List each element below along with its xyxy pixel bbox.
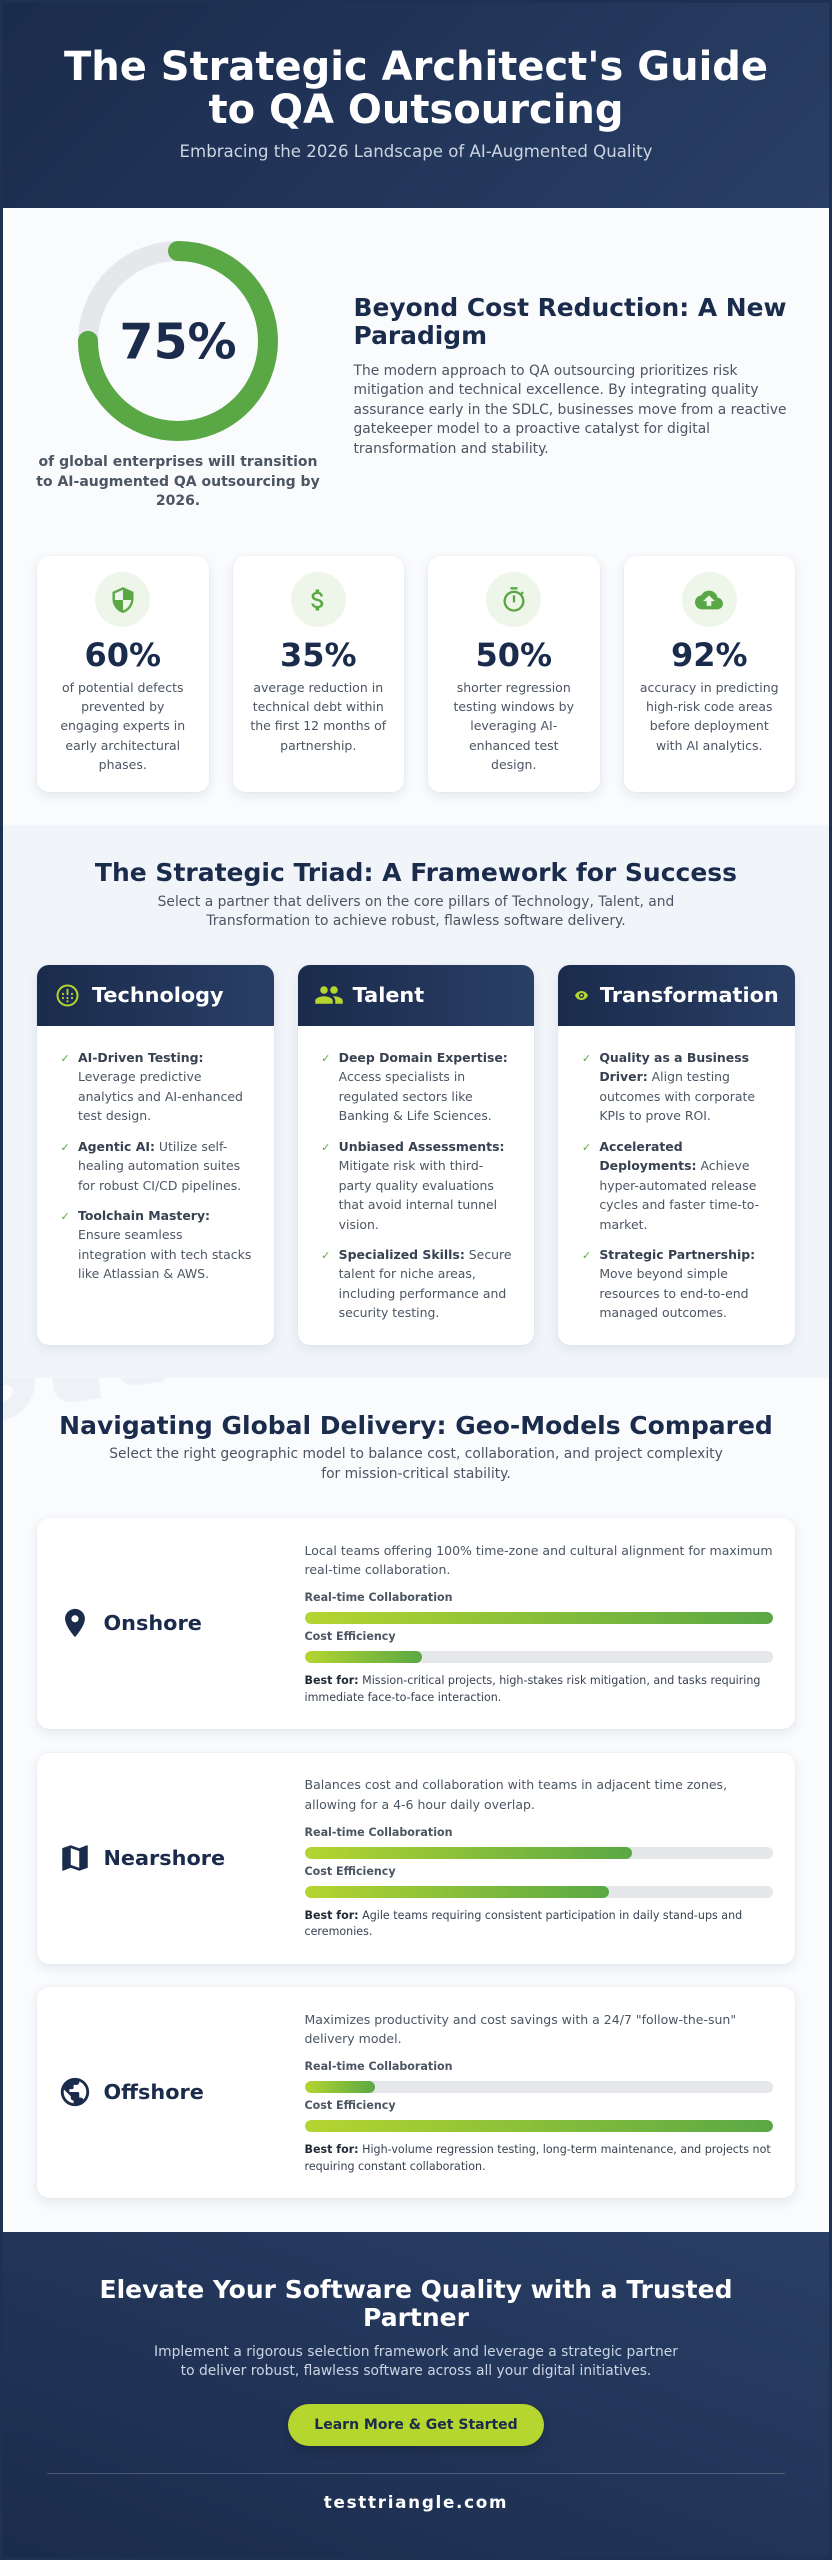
header banner bbox=[0, 0, 832, 208]
stat description: enhanced test bbox=[469, 738, 559, 753]
bullet text: security testing. bbox=[339, 1305, 439, 1320]
icon: shield bbox=[95, 572, 150, 627]
bar: cost 65% bbox=[304, 1886, 773, 1898]
title: The Strategic Architect's Guide bbox=[64, 44, 768, 90]
bullet text: Banking & Life Sciences. bbox=[339, 1108, 492, 1123]
bullet text: for robust CI/CD pipelines. bbox=[78, 1178, 241, 1193]
bullet text: Move beyond simple bbox=[599, 1266, 728, 1281]
intro paragraph: The modern approach to QA outsourcing prioritizes risk bbox=[354, 362, 738, 378]
model description: Local teams offering 100% time-zone and cultural alignment for maximum bbox=[304, 1542, 773, 1558]
bar label: Cost Efficiency bbox=[304, 1864, 396, 1878]
decorative watermark shapes bbox=[3, 1378, 164, 1420]
bullet text: Unbiased Assessments: bbox=[339, 1139, 504, 1154]
bullet text: KPIs to prove ROI. bbox=[599, 1108, 711, 1123]
website: testtriangle.com bbox=[324, 2492, 508, 2512]
stat value: 35% bbox=[280, 636, 357, 674]
bullet text: analytics and AI-enhanced bbox=[78, 1089, 243, 1104]
bullet text: like Atlassian & AWS. bbox=[78, 1266, 209, 1281]
model description: allowing for a 4-6 hour daily overlap. bbox=[304, 1797, 535, 1812]
model name: Offshore bbox=[104, 2080, 204, 2104]
geo card: Onshore bbox=[37, 1518, 795, 1729]
geo models heading: Navigating Global Delivery: Geo-Models Compared bbox=[59, 1411, 773, 1440]
stat description: accuracy in predicting bbox=[640, 680, 779, 694]
bullet text bbox=[599, 1050, 755, 1123]
best for note: Best for: Agile teams requiring consistent participation in daily stand-ups and bbox=[304, 1908, 742, 1922]
icon: map pin bbox=[65, 1608, 85, 1638]
stat value: 60% bbox=[84, 636, 161, 674]
geo models subheading: for mission-critical stability. bbox=[321, 1466, 511, 1482]
model description: Maximizes productivity and cost savings with a 24/7 "follow-the-sun" bbox=[304, 2012, 736, 2026]
bullet text: Driver: Align testing bbox=[599, 1069, 730, 1084]
model description: real-time collaboration. bbox=[304, 1562, 450, 1577]
title: to QA Outsourcing bbox=[208, 86, 624, 132]
donut caption: of global enterprises will transition bbox=[39, 454, 317, 470]
bullet text: resources to end-to-end bbox=[599, 1286, 749, 1301]
bullet text: Quality as a Business bbox=[599, 1050, 749, 1065]
pillar header bbox=[37, 965, 274, 1026]
bullet text bbox=[338, 1050, 508, 1123]
stat description: engaging experts in bbox=[60, 718, 185, 733]
best for note: Best for: High-volume regression testing, long-term maintenance, and projects not bbox=[304, 2143, 771, 2156]
footer paragraph: to deliver robust, flawless software across all your digital initiatives. bbox=[181, 2363, 651, 2379]
triad subheading: Transformation to achieve robust, flawless software delivery. bbox=[206, 913, 626, 929]
icon: people bbox=[315, 986, 343, 1004]
pillar: Talent bbox=[298, 965, 534, 1345]
bullet check: ✓ bbox=[582, 1052, 591, 1065]
bullet check: ✓ bbox=[60, 1141, 70, 1154]
bullet text: vision. bbox=[339, 1217, 379, 1232]
intro heading bbox=[354, 293, 786, 350]
stat description: average reduction in bbox=[253, 680, 383, 694]
bullet text: Specialized Skills: Secure bbox=[339, 1247, 512, 1262]
stat description bbox=[250, 680, 386, 753]
best for note bbox=[304, 2143, 771, 2173]
bullet text: Agentic AI: Utilize self- bbox=[78, 1139, 227, 1154]
intro heading: Paradigm bbox=[354, 321, 487, 350]
model description bbox=[304, 2012, 736, 2046]
geo models subheading: Select the right geographic model to balance cost, collaboration, and project complexity bbox=[109, 1446, 723, 1462]
footer heading bbox=[100, 2275, 732, 2332]
stat description: design. bbox=[491, 757, 536, 772]
stat description: testing windows by bbox=[453, 699, 574, 714]
bar: collaboration 15% bbox=[304, 2081, 773, 2093]
bullet text: outcomes with corporate bbox=[599, 1089, 755, 1104]
model description: Balances cost and collaboration with teams in adjacent time zones, bbox=[304, 1777, 727, 1792]
bullet text: Strategic Partnership: bbox=[599, 1247, 755, 1262]
stat card: 92% bbox=[624, 556, 795, 792]
bullet text bbox=[599, 1139, 759, 1232]
triad heading: The Strategic Triad: A Framework for Success bbox=[95, 858, 737, 886]
best for note bbox=[304, 1674, 760, 1704]
intro paragraph bbox=[353, 362, 787, 456]
stat description: with AI analytics. bbox=[656, 738, 763, 753]
stat card: 35% bbox=[232, 556, 404, 792]
bar label: Cost Efficiency bbox=[304, 1630, 396, 1643]
bullet text bbox=[338, 1139, 504, 1232]
stat description: partnership. bbox=[280, 738, 356, 753]
bullet text: cycles and faster time-to- bbox=[599, 1197, 759, 1212]
pillar header bbox=[298, 965, 534, 1026]
best for note: immediate face-to-face interaction. bbox=[304, 1691, 501, 1704]
bullet text: Access specialists in bbox=[339, 1069, 465, 1084]
bullet check: ✓ bbox=[321, 1141, 330, 1154]
bullet text bbox=[78, 1139, 241, 1193]
bullet text: Deep Domain Expertise: bbox=[339, 1050, 508, 1065]
model name: Onshore bbox=[104, 1611, 202, 1635]
donut caption: to AI-augmented QA outsourcing by bbox=[36, 474, 320, 490]
bar: cost 25% bbox=[304, 1651, 773, 1663]
stat description: technical debt within bbox=[253, 699, 384, 714]
bullet check: ✓ bbox=[60, 1210, 70, 1223]
icon: globe bbox=[60, 2078, 90, 2106]
bullet text: including performance and bbox=[339, 1286, 506, 1301]
donut caption: 2026. bbox=[156, 493, 200, 509]
pillar: Transformation bbox=[558, 965, 795, 1345]
pillar: Technology bbox=[37, 965, 274, 1345]
subtitle: Embracing the 2026 Landscape of AI-Augmented Quality bbox=[180, 142, 652, 161]
pillar title: Technology bbox=[92, 983, 224, 1007]
bullet text: Leverage predictive bbox=[78, 1069, 202, 1084]
bar: collaboration 70% bbox=[304, 1846, 773, 1858]
footer heading: Elevate Your Software Quality with a Trusted bbox=[100, 2275, 732, 2304]
model description: delivery model. bbox=[304, 2031, 402, 2046]
stat description bbox=[453, 680, 574, 772]
stat value: 92% bbox=[671, 636, 748, 674]
stat description: early architectural bbox=[65, 738, 180, 753]
stat description: high-risk code areas bbox=[646, 699, 773, 714]
pillar title: Talent bbox=[353, 983, 424, 1007]
bar: collaboration 100% bbox=[304, 1612, 773, 1624]
bullet text: managed outcomes. bbox=[599, 1305, 727, 1320]
bullet text bbox=[338, 1247, 512, 1320]
bullet text bbox=[78, 1050, 243, 1123]
bullet text bbox=[78, 1208, 251, 1281]
icon: map bbox=[62, 1845, 88, 1871]
stat description bbox=[640, 680, 779, 753]
bullet text: healing automation suites bbox=[78, 1158, 240, 1173]
bullet text: Mitigate risk with third- bbox=[339, 1158, 483, 1173]
triad subheading: Select a partner that delivers on the core pillars of Technology, Talent, and bbox=[158, 894, 674, 910]
geo models subheading bbox=[109, 1446, 723, 1482]
panel: strategic triad background bbox=[3, 825, 829, 1378]
intro paragraph: mitigation and technical excellence. By integrating quality bbox=[354, 382, 759, 398]
stat card: 50% bbox=[428, 556, 600, 792]
best for note: ceremonies. bbox=[304, 1925, 372, 1938]
button: learn more: Learn More & Get Started bbox=[314, 2417, 518, 2433]
best for note bbox=[304, 1908, 742, 1938]
geo card: Offshore bbox=[37, 1987, 795, 2198]
bullet text: Ensure seamless bbox=[78, 1227, 182, 1242]
icon: cloud upload bbox=[682, 572, 736, 627]
best for note: Best for: Mission-critical projects, high-stakes risk mitigation, and tasks requiring bbox=[304, 1674, 760, 1687]
bullet text: Deployments: Achieve bbox=[599, 1158, 750, 1173]
footer paragraph bbox=[154, 2344, 678, 2379]
best for note: requiring constant collaboration. bbox=[304, 2160, 486, 2173]
donut chart: 75%: 75% bbox=[119, 314, 237, 370]
bullet check: ✓ bbox=[582, 1141, 591, 1154]
stat description: leveraging AI- bbox=[470, 718, 557, 733]
panel: key statistic and intro bbox=[3, 208, 829, 825]
icon: timer bbox=[486, 572, 541, 627]
intro paragraph: transformation and stability. bbox=[354, 440, 549, 456]
icon: eye bbox=[575, 991, 588, 1000]
bullet text: AI-Driven Testing: bbox=[78, 1050, 203, 1065]
donut caption bbox=[36, 454, 320, 509]
stat description: phases. bbox=[99, 757, 147, 772]
bar label: Real-time Collaboration bbox=[304, 2060, 453, 2073]
bar label: Cost Efficiency bbox=[304, 2099, 396, 2112]
donut chart: 75% bbox=[78, 241, 278, 441]
model description bbox=[304, 1777, 727, 1812]
footer call to action bbox=[0, 2232, 832, 2560]
intro paragraph: gatekeeper model to a proactive catalyst for digital bbox=[354, 421, 710, 437]
stat description bbox=[60, 680, 185, 772]
stat value: 50% bbox=[475, 636, 552, 674]
bullet text bbox=[599, 1247, 755, 1320]
stat description: shorter regression bbox=[457, 680, 571, 694]
footer paragraph: Implement a rigorous selection framework and leverage a strategic partner bbox=[154, 2344, 678, 2360]
stat description: the first 12 months of bbox=[250, 718, 386, 733]
intro heading: Beyond Cost Reduction: A New bbox=[354, 293, 786, 322]
stat card: 60% bbox=[37, 556, 208, 792]
bar: cost 100% bbox=[304, 2120, 773, 2132]
model name: Nearshore bbox=[104, 1846, 225, 1870]
bullet check: ✓ bbox=[321, 1249, 330, 1262]
icon: technology chip bbox=[56, 984, 78, 1006]
bullet text: market. bbox=[599, 1217, 647, 1232]
title bbox=[64, 44, 768, 132]
pillar title: Transformation bbox=[600, 983, 779, 1007]
stat description: prevented by bbox=[81, 699, 164, 714]
bullet check: ✓ bbox=[60, 1052, 70, 1065]
bullet text: Toolchain Mastery: bbox=[78, 1208, 210, 1223]
bullet text: Accelerated bbox=[599, 1139, 683, 1154]
bullet text: hyper-automated release bbox=[599, 1178, 756, 1193]
bar label: Real-time Collaboration bbox=[304, 1591, 453, 1604]
icon: dollar bbox=[290, 572, 346, 627]
intro paragraph: assurance early in the SDLC, businesses move from a reactive bbox=[354, 402, 787, 418]
bullet text: party quality evaluations bbox=[339, 1178, 494, 1193]
footer heading: Partner bbox=[363, 2303, 469, 2332]
divider bbox=[47, 2473, 785, 2474]
bullet text: integration with tech stacks bbox=[78, 1247, 251, 1262]
pillar header bbox=[558, 965, 795, 1026]
model description bbox=[304, 1542, 773, 1577]
bar label: Real-time Collaboration bbox=[304, 1826, 453, 1838]
bullet check: ✓ bbox=[582, 1249, 591, 1262]
bullet text: talent for niche areas, bbox=[339, 1266, 476, 1281]
bullet text: test design. bbox=[78, 1108, 151, 1123]
triad subheading bbox=[158, 894, 674, 929]
geo card: Nearshore bbox=[37, 1752, 795, 1964]
stat description: before deployment bbox=[650, 718, 769, 733]
button: learn more bbox=[288, 2404, 544, 2446]
bullet text: that avoid internal tunnel bbox=[339, 1197, 497, 1212]
bullet text: regulated sectors like bbox=[339, 1089, 473, 1104]
bullet check: ✓ bbox=[321, 1052, 330, 1065]
stat description: of potential defects bbox=[62, 680, 184, 694]
